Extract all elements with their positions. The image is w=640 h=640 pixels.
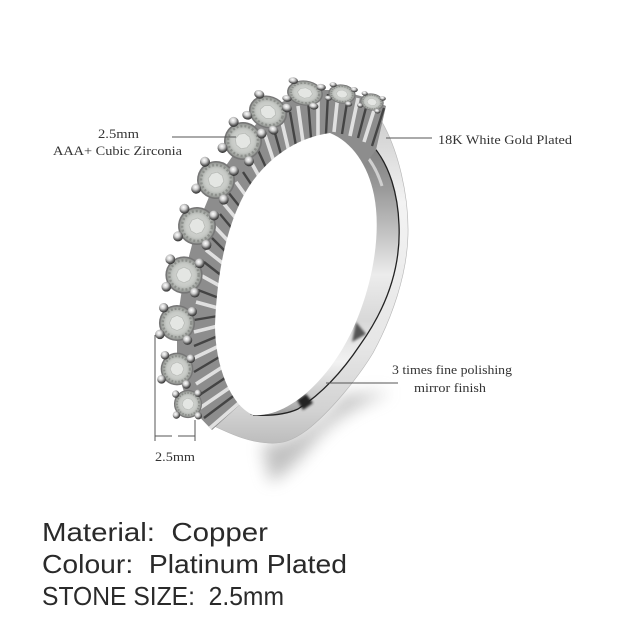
light ribs — [194, 94, 376, 428]
inner band edge line — [253, 145, 399, 415]
dimension: stone width — [155, 335, 195, 464]
ring hole — [215, 133, 377, 415]
stones row — [155, 76, 386, 424]
stone 6 — [189, 155, 240, 206]
stone 3 — [155, 303, 197, 345]
specification text: STONE SIZE: 2.5mm — [42, 581, 284, 611]
stone 9 — [281, 76, 327, 111]
ring shadow — [262, 392, 392, 482]
ring illustration — [155, 76, 408, 443]
stone 5 — [172, 203, 220, 251]
dimension: stone width: 2.5mm — [155, 449, 195, 464]
ring band inner surface — [250, 140, 398, 415]
dark ribs — [194, 94, 384, 418]
callout: plating: 18K White Gold Plated — [438, 132, 573, 147]
specification text: Material: Copper — [42, 517, 268, 547]
callout: stone type: 2.5mm — [98, 126, 139, 141]
stone 11 — [356, 90, 386, 114]
stone 10 — [324, 81, 358, 107]
stone 7 — [215, 115, 269, 169]
band dark reflection — [297, 394, 313, 410]
gallery ribs — [194, 94, 384, 428]
callout: stone type — [53, 126, 236, 158]
band grey reflection — [352, 322, 366, 342]
callout: polishing — [326, 362, 513, 395]
gallery base — [177, 90, 386, 430]
callout: polishing: mirror finish — [414, 380, 487, 395]
stone 1 — [169, 386, 206, 424]
specification text — [42, 517, 347, 611]
stone 8 — [239, 87, 294, 138]
ring band outer surface — [214, 122, 408, 443]
specification text: Colour: Platinum Plated — [42, 549, 347, 579]
callout: polishing: 3 times fine polishing — [392, 362, 513, 377]
callout: stone type: AAA+ Cubic Zirconia — [53, 143, 182, 158]
stone 2 — [157, 351, 195, 389]
stone 4 — [161, 254, 205, 298]
inner band highlight — [349, 139, 382, 186]
